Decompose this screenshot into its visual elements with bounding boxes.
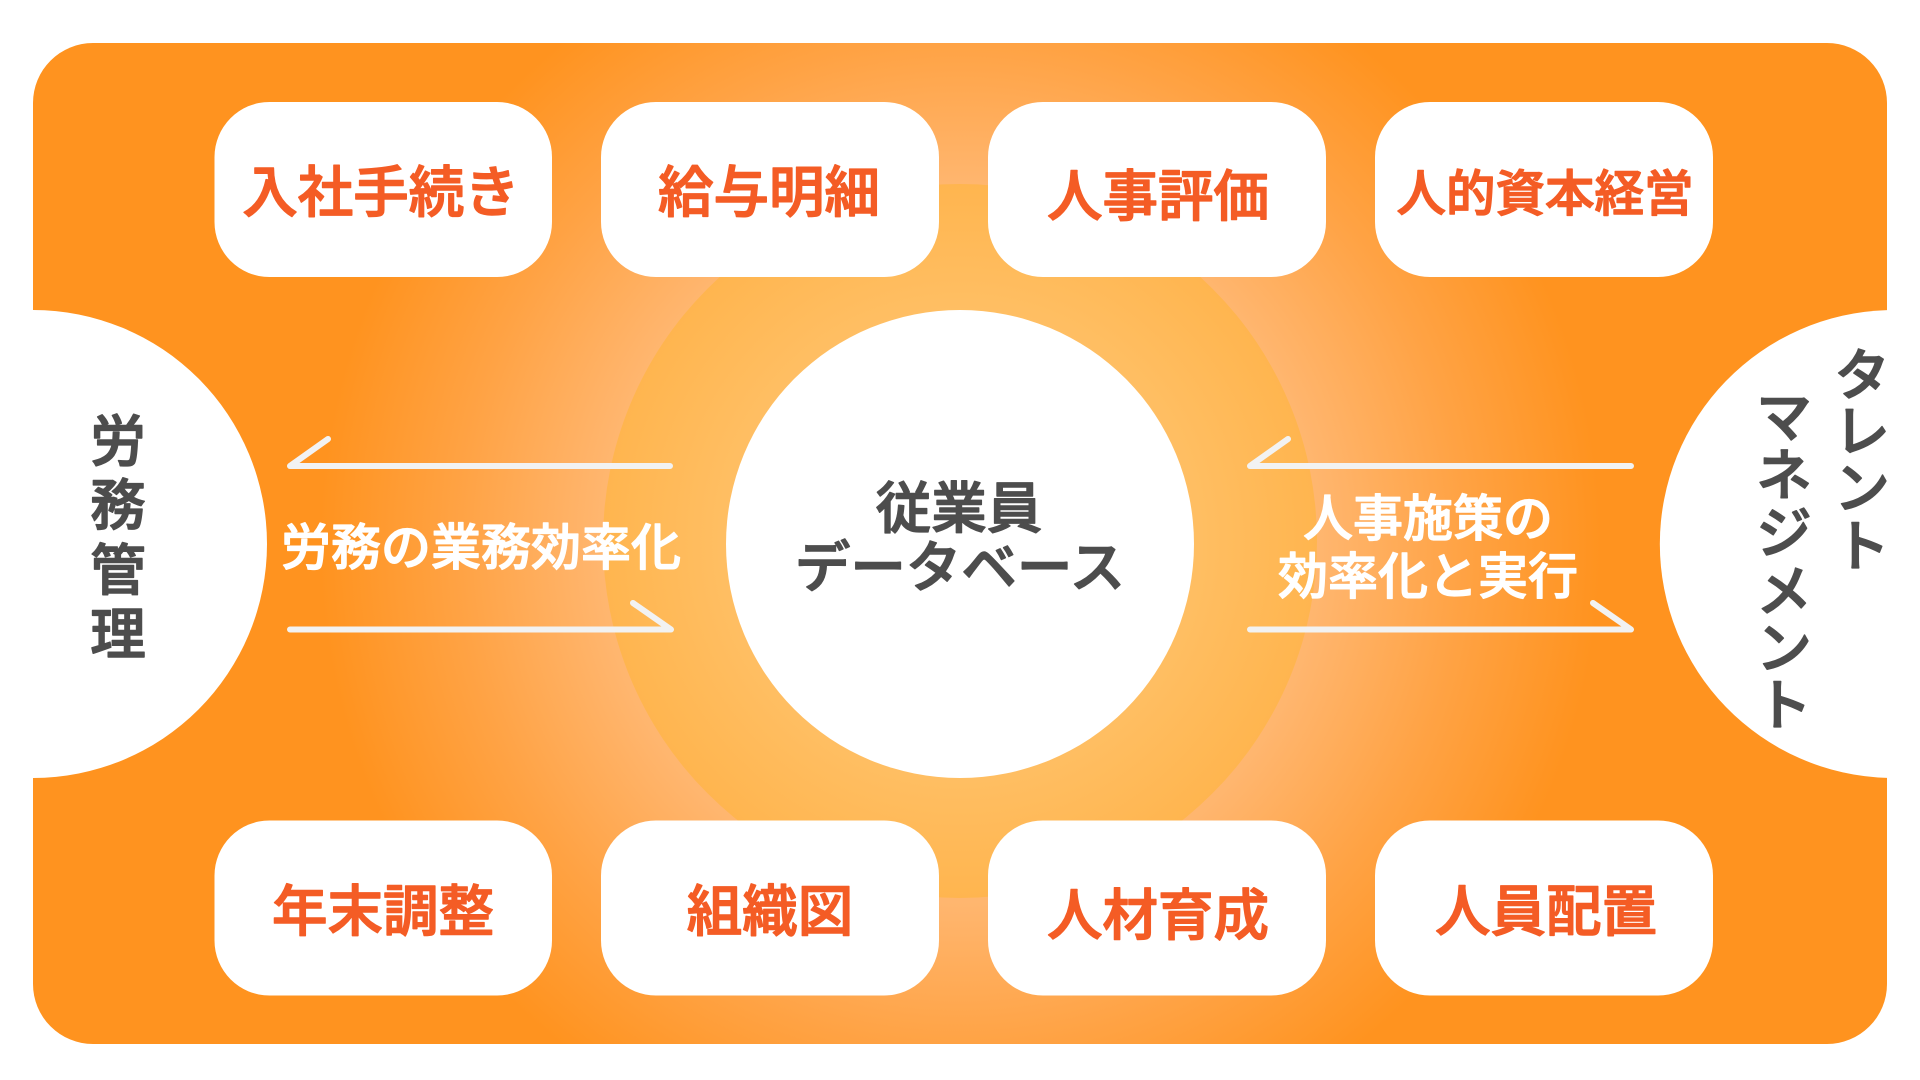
- top row of feature pills: [214, 102, 1713, 277]
- left half circle: labor management: 労務管理: [90, 411, 146, 666]
- right arrows and label: [1250, 439, 1631, 630]
- pill: year-end adjustment: 年末調整: [272, 881, 494, 943]
- arrow: to labor management: [290, 439, 670, 466]
- right half circle: talent management: [1660, 310, 1890, 778]
- pill: HR evaluation: [988, 102, 1326, 277]
- glow circle behind database: [603, 184, 1317, 898]
- pill: year-end adjustment: [214, 820, 552, 996]
- pill: onboarding: 入社手続き: [242, 162, 520, 224]
- left arrows and label: [281, 439, 681, 630]
- pill: onboarding: [214, 102, 552, 277]
- pill: payslip: [601, 102, 939, 277]
- pill: org chart: 組織図: [687, 881, 853, 943]
- pill: talent development: 人材育成: [1047, 885, 1269, 947]
- center circle: employee database: データベース: [795, 537, 1125, 599]
- arrow: to database: [290, 603, 671, 630]
- arrow: to talent management: [1250, 603, 1631, 630]
- center circle: employee database: [726, 310, 1194, 778]
- left half circle: labor management: [33, 310, 267, 778]
- pill: human capital management: 人的資本経営: [1396, 167, 1694, 222]
- right half circle: talent management: タレント: [1834, 345, 1890, 578]
- label: labor efficiency: 労務の業務効率化: [281, 520, 681, 576]
- bottom row of feature pills: [214, 820, 1713, 996]
- right half circle: talent management: マネジメント: [1756, 387, 1812, 737]
- pill: payslip: 給与明細: [658, 162, 880, 224]
- pill: HR evaluation: 人事評価: [1047, 166, 1269, 228]
- label: efficiency and execution: 効率化と実行: [1278, 549, 1578, 605]
- arrow: to database from talent: [1250, 439, 1631, 466]
- pill: human capital management: [1375, 102, 1713, 277]
- label: HR measures: 人事施策の: [1303, 491, 1553, 547]
- center circle: employee database: 従業員: [876, 478, 1042, 540]
- pill: talent development: [988, 820, 1326, 996]
- pill: staffing: [1375, 820, 1713, 996]
- pill: org chart: [601, 820, 939, 996]
- pill: staffing: 人員配置: [1435, 881, 1657, 943]
